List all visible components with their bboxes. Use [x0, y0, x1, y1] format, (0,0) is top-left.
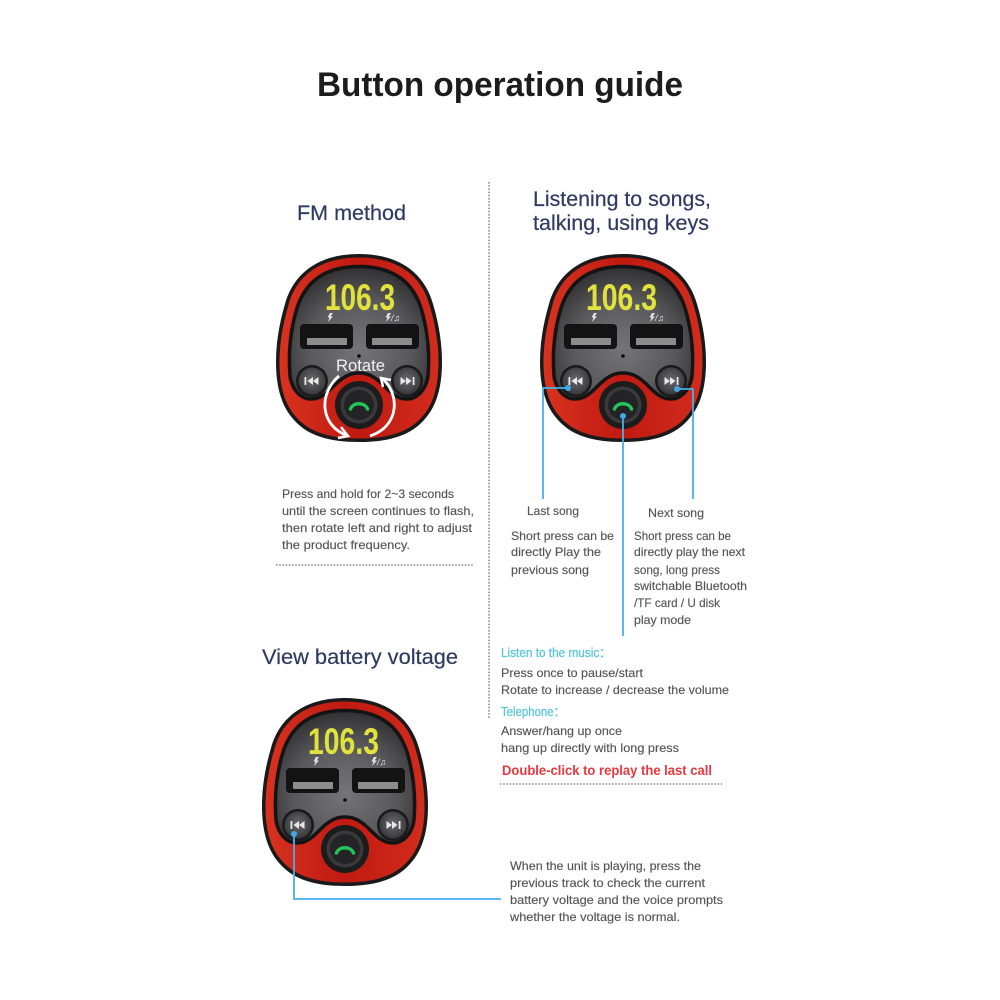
- device: FM transmitter with callouts: 106.3: [586, 277, 657, 318]
- heading: listening to songs: Listening to songs,: [533, 188, 711, 211]
- text: centre knob functions: Answer/hang up once: [501, 724, 622, 738]
- device: FM transmitter with callouts: /♫: [654, 313, 664, 323]
- text: next song: directly play the next: [634, 545, 746, 559]
- device: FM transmitter with rotate arrows: /♫: [390, 313, 400, 323]
- text: next song: play mode: [634, 613, 691, 627]
- instructions: FM method: the product frequency.: [282, 538, 410, 552]
- heading: listening to songs: talking, using keys: [533, 212, 709, 235]
- panel: listening, talking, keys: [500, 188, 747, 784]
- text: next song: Short press can be: [634, 529, 731, 543]
- text: last song: [511, 504, 614, 577]
- device: FM transmitter with battery callout: 106.3: [308, 721, 379, 762]
- text: centre knob functions: Double-click to replay the last call: [502, 762, 712, 778]
- text: centre knob functions: Listen to the music：: [501, 646, 611, 660]
- text: next song: song, long press: [634, 563, 720, 577]
- instructions: battery voltage: previous track to check the current: [510, 876, 706, 890]
- text: next song: switchable Bluetooth: [634, 579, 747, 593]
- text: last song: Short press can be: [511, 529, 614, 543]
- text: centre knob functions: hang up directly with long press: [501, 741, 679, 755]
- text: last song: directly Play the: [511, 545, 601, 559]
- device: FM transmitter with callouts: [540, 254, 706, 442]
- title: Button operation guide: [317, 66, 683, 104]
- panel: view battery voltage: [262, 646, 723, 924]
- device: FM transmitter with battery callout: /♫: [376, 757, 386, 767]
- device: FM transmitter with rotate arrows: 106.3: [325, 277, 395, 318]
- device: FM transmitter with rotate arrows: [276, 254, 442, 442]
- device: FM transmitter with rotate arrows: Rotate: [336, 356, 385, 375]
- instructions: battery voltage: When the unit is playing, press the: [510, 859, 701, 873]
- device: FM transmitter with battery callout: [262, 698, 428, 886]
- instructions: battery voltage: [509, 859, 723, 924]
- text: centre knob functions: [501, 646, 729, 778]
- heading: FM method: FM method: [297, 202, 406, 225]
- text: centre knob functions: Press once to pause/start: [501, 666, 644, 680]
- instructions: FM method: then rotate left and right to adjust: [282, 521, 473, 535]
- text: last song: Last song: [527, 504, 579, 518]
- instructions: FM method: Press and hold for 2~3 seconds: [282, 487, 454, 501]
- callout lines: keys: [543, 385, 693, 636]
- heading: view battery voltage: View battery voltage: [262, 646, 458, 669]
- instructions: FM method: [282, 487, 474, 552]
- text: last song: previous song: [511, 563, 589, 577]
- panel: FM method: [276, 202, 474, 565]
- heading: listening to songs: [533, 188, 711, 235]
- text: next song: /TF card / U disk: [634, 596, 721, 610]
- text: centre knob functions: Rotate to increase / decrease the volume: [501, 683, 729, 697]
- instructions: FM method: until the screen continues to flash,: [282, 504, 474, 518]
- callout line: previous track key: [291, 831, 501, 899]
- text: next song: Next song: [648, 506, 704, 520]
- text: centre knob functions: Telephone：: [501, 705, 565, 719]
- instructions: battery voltage: whether the voltage is normal.: [509, 910, 680, 924]
- text: next song: [634, 506, 747, 627]
- instructions: battery voltage: battery voltage and the voice prompts: [510, 893, 723, 907]
